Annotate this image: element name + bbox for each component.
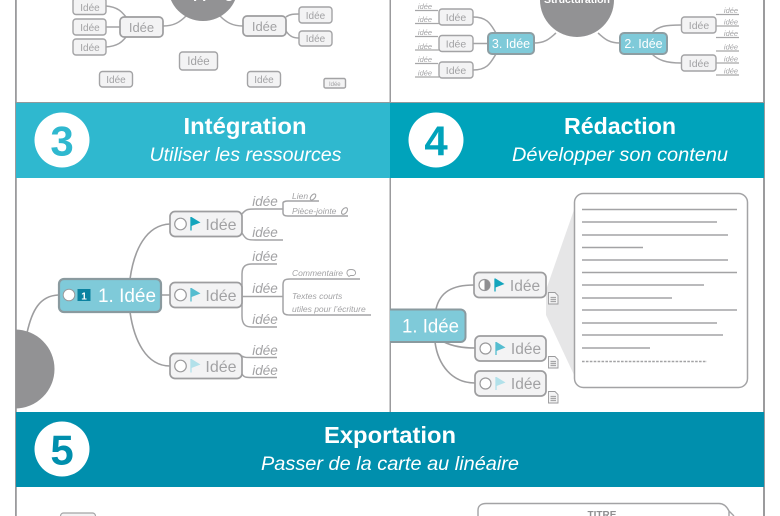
panel: step 2 top-left mind map (73, 0, 346, 88)
panel: step 2 top-right mind map: idée (418, 15, 432, 24)
panel: step 2 top-right mind map: 2. Idée (624, 37, 663, 51)
panel: step 2 top-left mind map: Idée (254, 75, 274, 86)
heading: step 4 Rédaction: Développer son contenu (512, 145, 728, 166)
panel: step 4 writing map and document (380, 194, 748, 403)
node: Idée with dark flag (170, 212, 242, 236)
node: half-done Idée (474, 272, 546, 298)
panel: step 2 top-right mind map: Idée (689, 58, 709, 70)
node: Idée mid flag: Idée (511, 341, 541, 358)
icon: note pages (548, 292, 558, 403)
labels: resources: Pièce-jointe (292, 206, 337, 216)
panel: step 2 top-left mind map: Idée (187, 56, 210, 68)
panel: step 2 top-left mind map: Idée (306, 34, 326, 45)
node: Idée with dark flag: Idée (205, 217, 237, 234)
heading: step 5 Exportation: 5 (50, 426, 74, 474)
document: title page (478, 504, 734, 516)
panel: step 2 top-right mind map: Idée (446, 12, 466, 24)
node: 1. Idée: 1. Idée (98, 286, 156, 307)
labels: resources (292, 191, 366, 314)
panel: step 2 top-left mind map: Idée (329, 82, 341, 88)
labels: idée branches: idée (252, 225, 278, 240)
panel: step 2 top-right mind map: idée (418, 55, 432, 64)
heading: step 4 Rédaction: 4 (424, 118, 448, 164)
panel: step 2 top-right mind map: idée (724, 54, 738, 64)
panel: step 2 top-left mind map: Idée (306, 11, 326, 22)
panel: step 2 top-right mind map: idée (418, 68, 432, 78)
panel: step 2 top-right mind map: idée (724, 6, 738, 15)
icon: link and attachment (309, 193, 349, 215)
panel: step 2 top-left mind map: Idée (129, 20, 154, 35)
labels: idée branches: idée (252, 363, 278, 378)
labels: resources: Lien (292, 191, 308, 201)
labels: idée branches: idée (252, 343, 278, 358)
heading: step 3 Intégration (16, 103, 390, 178)
panel: step 2 top-left mind map: Idée (80, 23, 100, 34)
labels: idée branches: idée (252, 281, 278, 296)
panel: step 2 top-right mind map: idée (418, 42, 432, 51)
labels: idée branches (252, 194, 278, 378)
node: 1. Idée: 1. Idée (402, 316, 459, 338)
panel: step 2 top-left mind map: Idée (106, 75, 126, 86)
node: Idée mid flag (475, 336, 546, 361)
node: Idée with mid flag: Idée (205, 288, 237, 305)
panel: step 3 integration map (0, 191, 371, 408)
heading: step 5 Exportation (16, 412, 764, 487)
heading: step 4 Rédaction (390, 103, 764, 178)
heading: step 3 Intégration: Utiliser les ressources (150, 145, 342, 166)
node: Idée light flag (475, 371, 546, 396)
panel: step 2 top-right mind map (415, 0, 739, 78)
heading: step 3 Intégration: Intégration (184, 113, 306, 139)
node: Idée with light flag (170, 354, 242, 378)
node: Idée light flag: Idée (511, 376, 541, 393)
heading: step 4 Rédaction: Rédaction (564, 113, 676, 139)
panel: step 2 top-left mind map: Idée (80, 3, 100, 14)
labels: resources: utiles pour l’écriture (292, 304, 366, 314)
panel: step 2 top-right mind map: idée (724, 42, 738, 52)
document page (574, 194, 748, 388)
node: 1. Idée (380, 310, 466, 342)
node: cropped idea box (60, 513, 96, 516)
heading: step 5 Exportation: Exportation (324, 422, 456, 448)
labels: idée branches: idée (252, 194, 278, 209)
node: 1. Idée (59, 279, 161, 312)
panel: step 2 top-right mind map: Idée (446, 38, 466, 50)
labels: resources: Commentaire (292, 268, 343, 278)
heading: step 5 Exportation: Passer de la carte au linéaire (261, 454, 519, 475)
icon: comment bubble (347, 270, 356, 276)
panel: step 2 top-right mind map: Idée (446, 65, 466, 77)
panel: step 2 top-right mind map: idée (724, 66, 738, 76)
node: half-done Idée: Idée (510, 278, 540, 295)
panel: step 2 top-right mind map: idée (724, 18, 738, 26)
panel: step 2 top-right mind map: idée (418, 28, 432, 37)
panel: step 2 top-left mind map: Idée (252, 19, 277, 34)
heading: step 3 Intégration: 3 (50, 118, 74, 164)
panel: step 5 export preview (60, 504, 734, 516)
node: Idée with light flag: Idée (205, 359, 237, 376)
node: 1. Idée: 1 (81, 292, 87, 302)
panel: step 2 top-right mind map: idée (418, 2, 432, 11)
panel: step 2 top-left mind map: Idée (80, 43, 100, 54)
panel: step 2 top-right mind map: 3. Idée (492, 37, 530, 51)
panel: step 2 top-right mind map: Idée (689, 20, 709, 32)
labels: idée branches: idée (252, 312, 278, 327)
labels: resources: Textes courts (292, 291, 343, 301)
panel: step 2 top-right mind map: idée (724, 29, 738, 38)
labels: idée branches: idée (252, 249, 278, 264)
node: Idée with mid flag (170, 282, 242, 308)
